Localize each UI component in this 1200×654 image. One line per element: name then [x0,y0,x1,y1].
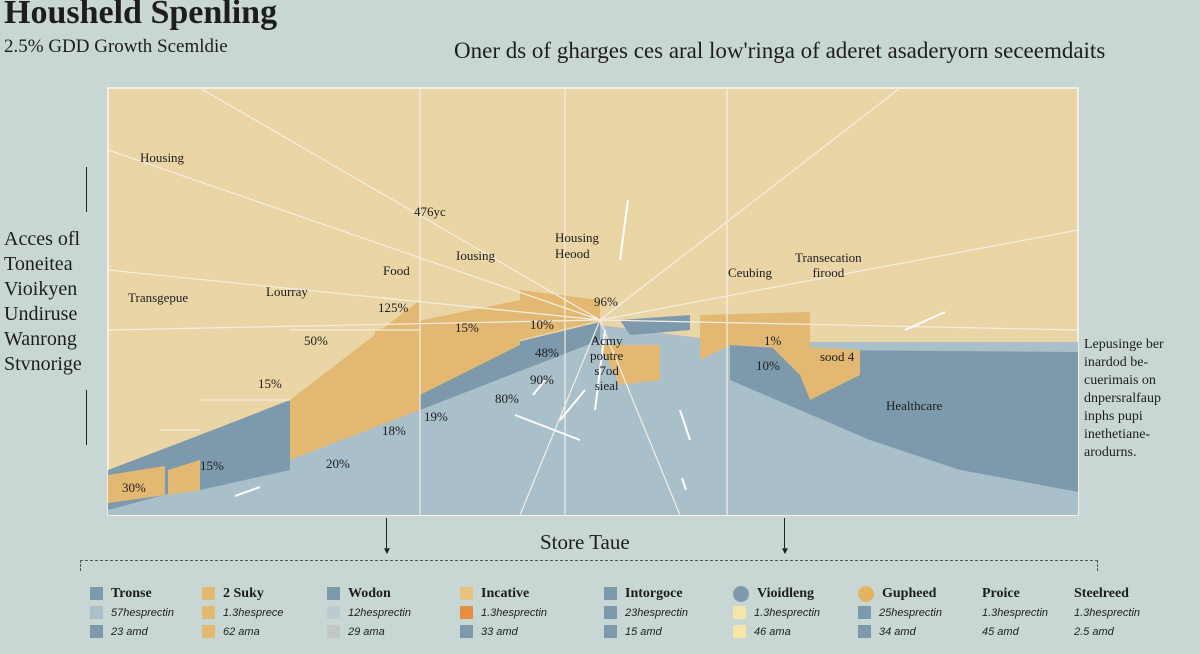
text: Proice [982,586,1020,600]
text: ▼ [780,546,790,557]
text: poutre [590,348,623,363]
text: 48% [535,345,559,360]
text: 10% [530,317,554,332]
text: Wodon [348,586,391,600]
right side text: arodurns. [1084,445,1136,460]
text: Intorgoce [625,586,683,600]
subtitle: 2.5% GDD Growth Scemldie [4,36,228,57]
text: 18% [382,423,406,438]
text: 46 ama [754,626,791,638]
text: 2.5 amd [1074,626,1114,638]
text: 15% [258,376,282,391]
right side text: dnpersralfaup [1084,391,1161,406]
text: 80% [495,391,519,406]
text: Healthcare [886,398,942,413]
text: 1% [764,333,781,348]
right side text [1084,337,1164,460]
left side text with arrows: Acces ofl [4,228,80,250]
text: 125% [378,300,408,315]
bottom label: Store Taue [540,530,630,554]
text: 23hesprectin [625,606,688,618]
text: firood [812,265,844,280]
right side text: inardod be- [1084,355,1148,370]
text: Transecation [795,250,862,265]
text: 45 amd [982,626,1019,638]
text: sood 4 [820,349,854,364]
right side text: inethetiane- [1084,427,1150,442]
text: Vioidleng [757,586,814,600]
text: 1.3hesprectin [1074,606,1140,618]
text: 15 amd [625,626,662,638]
legend [90,586,1140,638]
text: 90% [530,372,554,387]
text: 20% [326,456,350,471]
text: 476yc [414,204,446,219]
text: Transgepue [128,290,188,305]
text: 34 amd [879,626,916,638]
text: Food [383,263,410,278]
left side text with arrows: Stvnorige [4,353,82,375]
text: Tronse [111,586,152,600]
text: Lourray [266,284,308,299]
text: sieal [595,378,619,393]
left side text with arrows: Undiruse [4,303,77,325]
text: 1.3hesprece [223,606,284,618]
text: 1.3hesprectin [754,606,820,618]
text: 15% [455,320,479,335]
text: Steelreed [1074,586,1129,600]
text: 50% [304,333,328,348]
left side text with arrows: Toneitea [4,253,73,275]
text: 10% [756,358,780,373]
left side text with arrows: Wanrong [4,328,77,350]
text: Gupheed [882,586,936,600]
text: Iousing [456,248,495,263]
text: Acmy [591,333,622,348]
text: 1.3hesprectin [481,606,547,618]
left side text with arrows: Vioikyen [4,278,77,300]
text: Heood [555,246,590,261]
text: 2 Suky [223,586,264,600]
arrows under map: ▼ [382,546,392,557]
text: Housing [140,150,184,165]
text: Incative [481,586,529,600]
text: 12hesprectin [348,606,411,618]
right side text: cuerimais on [1084,373,1156,388]
text: 57hesprectin [111,606,174,618]
left side text with arrows [4,167,87,445]
right side text: inphs pupi [1084,409,1143,424]
text: 96% [594,294,618,309]
dashed divider [80,560,1098,571]
text: 29 ama [348,626,385,638]
text: s7od [594,363,619,378]
text: 19% [424,409,448,424]
map labels [122,150,942,495]
text: 33 amd [481,626,518,638]
text: 15% [200,458,224,473]
right side text: Lepusinge ber [1084,337,1164,352]
heading right: Oner ds of gharges ces aral low'ringa of aderet asaderyorn seceemdaits [454,38,1105,63]
text: Housing [555,230,599,245]
text: 62 ama [223,626,260,638]
text: 25hesprectin [879,606,942,618]
text: Ceubing [728,265,772,280]
text: 23 amd [111,626,148,638]
text: 1.3hesprectin [982,606,1048,618]
text: 30% [122,480,146,495]
